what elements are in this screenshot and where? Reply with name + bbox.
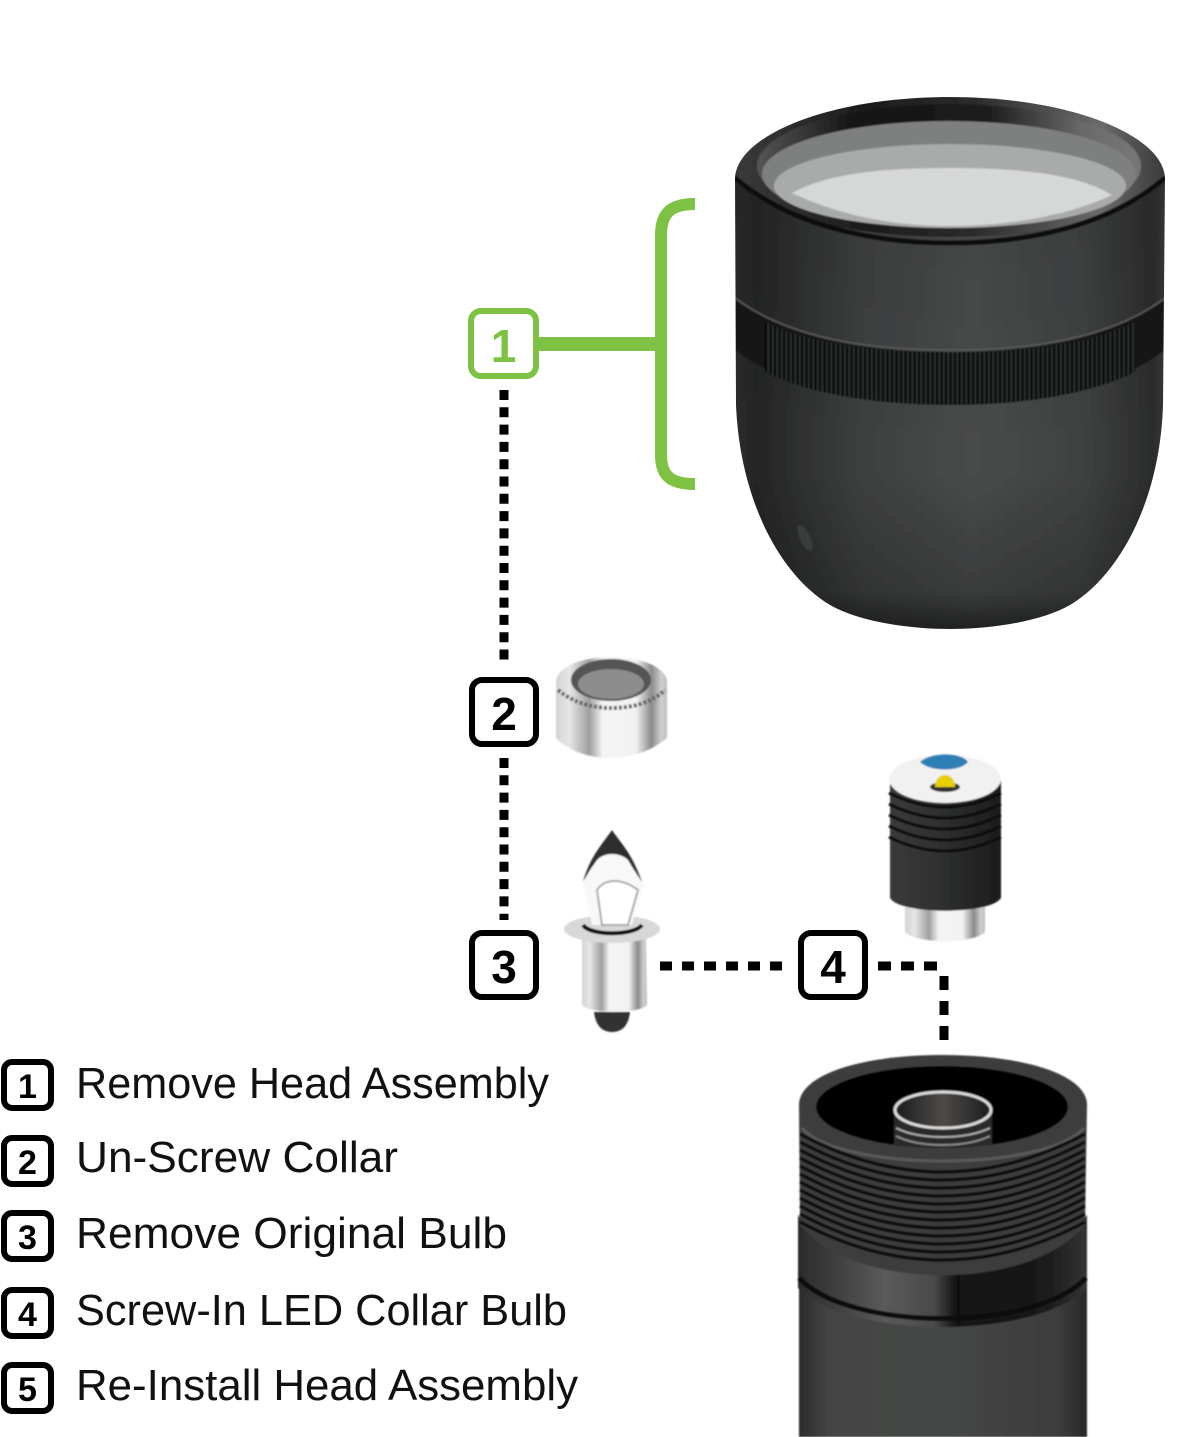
step badge 4 — [801, 933, 865, 997]
legend item 5: Re-Install Head Assembly — [76, 1361, 578, 1410]
step badge 3 — [472, 933, 536, 997]
inner bulb socket — [894, 1092, 992, 1150]
dotted connector: step 2 to step 3 — [500, 758, 508, 920]
step badge 2: 2 — [491, 688, 517, 740]
legend item 4: Screw-In LED Collar Bulb — [76, 1286, 567, 1335]
legend item 2: 2 — [18, 1144, 37, 1182]
legend item 1: 1 — [18, 1068, 37, 1106]
icon: flashlight head assembly — [730, 90, 1170, 635]
icon: LED collar bulb — [889, 754, 1001, 941]
legend item 3: 3 — [18, 1219, 37, 1257]
icon: metal collar — [556, 657, 667, 758]
callout: green bracket — [661, 204, 695, 484]
barrel thread rings — [800, 1134, 1085, 1260]
icon: original incandescent bulb — [564, 830, 660, 1032]
dotted connector: step 1 to step 2 — [500, 390, 508, 662]
icon: flashlight barrel — [798, 1055, 1087, 1437]
legend item 2: Un-Screw Collar — [76, 1133, 398, 1182]
step badge 1 (green): 1 — [491, 320, 516, 372]
legend item 1: Remove Head Assembly — [76, 1059, 549, 1108]
legend: step list — [4, 1059, 578, 1411]
legend item 3: Remove Original Bulb — [76, 1209, 507, 1258]
dotted connector: step 3 to step 4 — [660, 962, 784, 970]
LED thread rings — [889, 793, 1001, 851]
knurled band — [735, 298, 1165, 405]
callout: green connector line — [537, 337, 661, 351]
step badge 4: 4 — [820, 941, 846, 993]
legend item 4: 4 — [18, 1296, 37, 1334]
step badge 1 (green) — [471, 311, 536, 376]
legend item 5: 5 — [18, 1371, 37, 1409]
step badge 2 — [472, 680, 536, 744]
dotted connector: step 4 to barrel — [878, 966, 944, 1040]
step badge 3: 3 — [491, 941, 517, 993]
